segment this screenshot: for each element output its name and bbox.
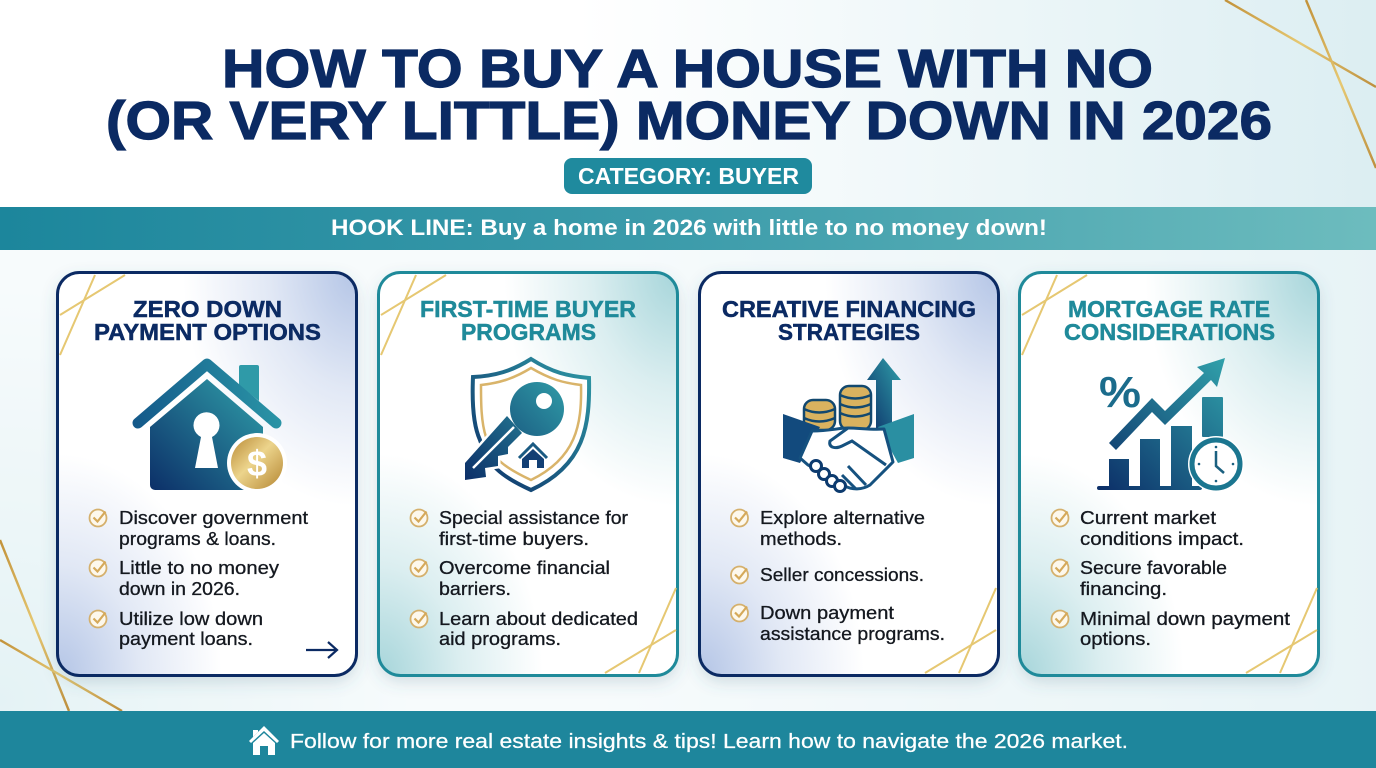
decorative gold lines: bottom left: [0, 540, 122, 711]
item: secure favorable financing: [1052, 557, 1227, 599]
card 1 heading: [94, 296, 321, 345]
card 3 heading: CREATIVE FINANCING: [722, 296, 976, 322]
card 3 gold accent: [925, 588, 996, 673]
icon: house with keyhole and coin: [138, 364, 287, 493]
card 4 heading: CONSIDERATIONS: [1064, 319, 1275, 345]
card 2 heading: [420, 296, 636, 345]
card 4 gold accents: [1022, 275, 1317, 673]
decorative gold lines: top right: [1225, 0, 1376, 168]
hook line banner: HOOK LINE: Buy a home in 2026 with little to no money down!: [331, 215, 1047, 240]
item: dedicated aid programs: [410, 608, 638, 649]
item: secure favorable financing: financing.: [1080, 578, 1167, 599]
title: [106, 39, 1272, 151]
item: utilize low down payment loans: Utilize low down: [119, 608, 263, 629]
card 2 background: [378, 272, 678, 676]
item: discover government programs: Discover government: [119, 507, 308, 528]
card 2 heading: PROGRAMS: [461, 319, 596, 345]
item: discover government programs: [90, 507, 308, 549]
item: utilize low down payment loans: payment loans.: [119, 628, 253, 649]
item: special assistance: Special assistance for: [439, 507, 628, 528]
item: explore alternative methods: methods.: [760, 528, 842, 549]
item: seller concessions: Seller concessions.: [760, 564, 924, 585]
item: explore alternative methods: [731, 507, 925, 549]
card 3 background: [700, 272, 998, 676]
item: utilize low down payment loans: [90, 608, 263, 649]
panel: first-time buyer programs: [378, 272, 678, 676]
category badge: [564, 158, 812, 194]
card 3 checklist: [731, 507, 945, 644]
item: minimal down payment: Minimal down payment: [1080, 608, 1290, 629]
item: overcome financial barriers: barriers.: [439, 578, 511, 599]
item: overcome financial barriers: Overcome financial: [439, 557, 610, 578]
panel: creative financing strategies: [700, 272, 998, 676]
card 2 checklist: [410, 507, 638, 649]
hook line banner: [0, 207, 1376, 250]
item: current market conditions: conditions impact.: [1080, 528, 1244, 549]
card 4 heading: MORTGAGE RATE: [1068, 296, 1270, 322]
icon: handshake, coins and arrow: [783, 358, 914, 492]
item: secure favorable financing: Secure favorable: [1080, 557, 1227, 578]
item: minimal down payment: [1052, 608, 1290, 649]
item: dedicated aid programs: Learn about dedicated: [439, 608, 638, 629]
item: little to no money down: Little to no money: [119, 557, 280, 578]
icon: rising chart with percent and clock: [1097, 358, 1244, 492]
category badge: CATEGORY: BUYER: [578, 163, 799, 189]
panel: mortgage rate considerations: [1020, 272, 1318, 676]
item: minimal down payment: options.: [1080, 628, 1151, 649]
item: current market conditions: Current market: [1080, 507, 1216, 528]
card 4 background: [1020, 272, 1318, 676]
card 4 checklist: [1052, 507, 1290, 649]
icon: footer house: [249, 726, 279, 755]
icon: key on shield: [465, 359, 589, 490]
card 4 heading: [1064, 296, 1275, 345]
item: down payment assistance: Down payment: [760, 602, 894, 623]
title: HOW TO BUY A HOUSE WITH NO: [222, 39, 1153, 99]
card 3 heading: STRATEGIES: [778, 319, 920, 345]
item: discover government programs: programs & loans.: [119, 528, 276, 549]
card 3 heading: [722, 296, 976, 345]
item: little to no money down: down in 2026.: [119, 578, 240, 599]
card 1 heading: PAYMENT OPTIONS: [94, 319, 321, 345]
item: down payment assistance: [731, 602, 945, 644]
card 1 checklist: [90, 507, 308, 649]
footer text: Follow for more real estate insights & tips! Learn how to navigate the 2026 market.: [290, 730, 1128, 753]
item: special assistance: [410, 507, 628, 549]
card 2 heading: FIRST-TIME BUYER: [420, 296, 636, 322]
item: overcome financial barriers: [410, 557, 610, 599]
footer banner: [0, 711, 1376, 768]
item: special assistance: first-time buyers.: [439, 528, 589, 549]
item: current market conditions: [1052, 507, 1244, 549]
item: dedicated aid programs: aid programs.: [439, 628, 561, 649]
item: down payment assistance: assistance programs.: [760, 623, 945, 644]
card 1 gold accent: [60, 275, 125, 355]
item: explore alternative methods: Explore alternative: [760, 507, 925, 528]
title: (OR VERY LITTLE) MONEY DOWN IN 2026: [106, 91, 1272, 151]
card 1 heading: ZERO DOWN: [133, 296, 282, 322]
item: little to no money down: [90, 557, 280, 599]
icon: rising chart with percent and clock: %: [1099, 368, 1141, 417]
icon: house with keyhole and coin: $: [247, 443, 267, 484]
panel: zero down payment options: [58, 272, 356, 676]
arrow: next: [306, 642, 337, 658]
card 1 background: [58, 272, 356, 676]
card 2 gold accents: [381, 275, 676, 673]
